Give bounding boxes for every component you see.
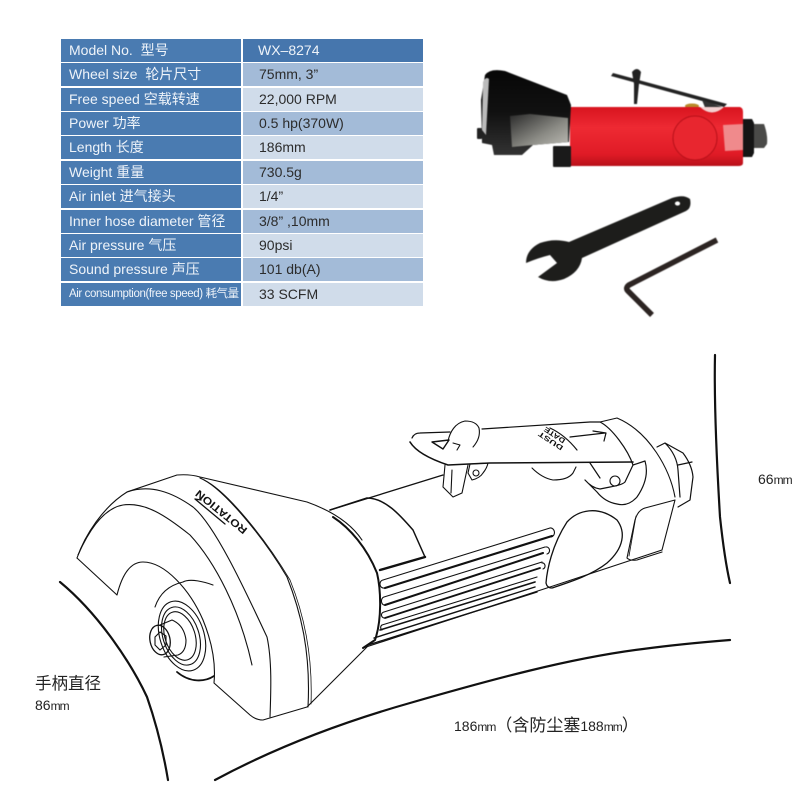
row: free speed [61,88,423,111]
side cover panels [546,511,622,588]
row: sound pressure [61,258,423,281]
row: weight: Weight 重量 [69,164,144,180]
row: model number [61,39,423,62]
lever label: DUST [537,429,565,451]
row: inner hose diameter [61,210,423,233]
dimension: handle diameter [35,674,101,713]
tool black guard [477,70,571,167]
row: power [61,112,423,135]
row: weight [61,161,423,184]
row: power: Power 功率 [69,115,141,131]
safety lever [410,421,646,505]
dimension: height: 66mm [758,471,792,487]
row: sound pressure: 101 db(A) [259,261,320,277]
row: inner hose diameter: 3/8” ,10mm [259,213,330,229]
dimension: length: 186mm（含防尘塞188mm） [454,716,639,735]
tool trigger lever [611,69,727,116]
row: air consumption [61,283,423,306]
row: air pressure: Air pressure 气压 [69,237,176,253]
rotation arrow [195,499,225,524]
tool body [330,418,675,648]
row: weight: 730.5g [259,164,302,180]
specification table [61,39,423,306]
row: length [61,136,423,159]
row: sound pressure: Sound pressure 声压 [69,261,200,277]
product photo and accessories [476,68,768,318]
dimension: handle diameter: 86mm [35,697,69,713]
row: air inlet: 1/4” [259,188,283,204]
icon: cut-off tool photo [477,69,767,167]
row: wheel size [61,63,423,86]
row: air pressure: 90psi [259,237,292,253]
row: free speed: 22,000 RPM [259,91,337,107]
row: air inlet [61,185,423,208]
row: air pressure [61,234,423,257]
row: length: 186mm [259,139,306,155]
row: inner hose diameter: Inner hose diameter 管径 [69,213,225,229]
row: wheel size: Wheel size 轮片尺寸 [69,66,201,82]
tool red body [570,107,743,166]
spindle hub and bolt [147,580,214,680]
row: air consumption: 33 SCFM [259,286,318,302]
dimension: handle diameter: 手柄直径 [35,675,101,693]
dimension curves [60,355,730,780]
end nut [657,443,693,507]
row: model number: WX–8274 [258,42,319,58]
tool air inlet nut [743,119,767,157]
row: model number: Model No. 型号 [69,42,169,58]
row: air inlet: Air inlet 进气接头 [69,188,176,204]
lever label: DATE [543,425,567,444]
icon: spanner [526,196,690,281]
guard [77,475,367,720]
row: length: Length 长度 [69,139,144,155]
icon: hex key [627,240,717,315]
rotation label: ROTATION [193,487,250,536]
row: air consumption: Air consumption(free speed) 耗气量 [69,288,239,300]
row: free speed: Free speed 空载转速 [69,91,200,107]
row: wheel size: 75mm, 3” [259,66,318,82]
row: power: 0.5 hp(370W) [259,115,344,131]
body grooves [368,528,554,645]
lever label [537,423,569,451]
lever arrow [550,428,606,450]
